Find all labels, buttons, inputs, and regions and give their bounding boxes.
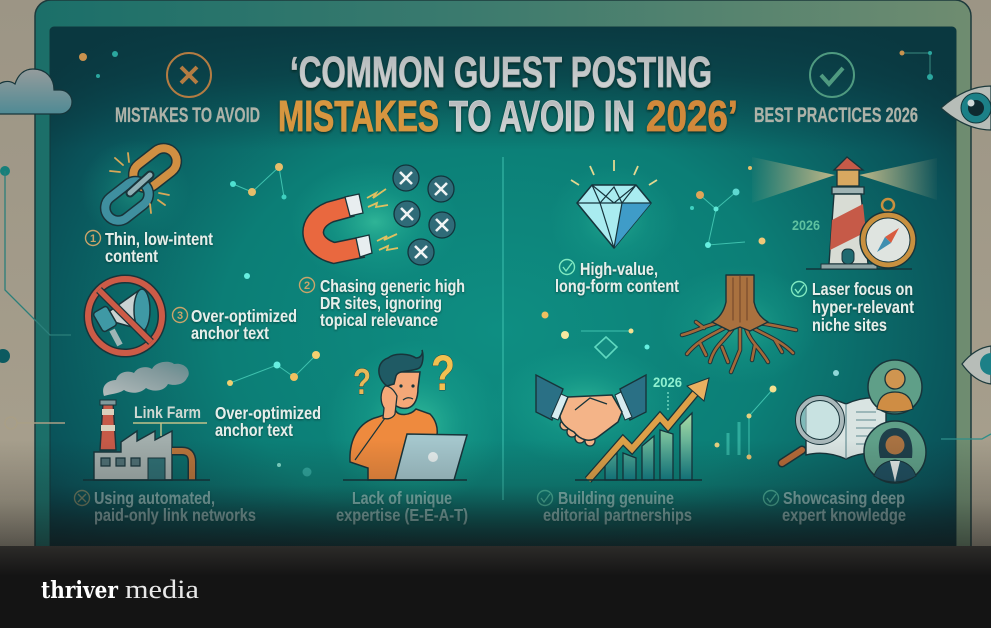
text: over-optimized anchor text: Over-optimized [215,403,321,423]
text: thin low-intent content: content [105,246,158,266]
text: high-value long-form content: High-value, [580,259,658,279]
icon: handshake [536,375,646,446]
icon: magnet attracting crosses [313,165,455,265]
text: chasing generic high DR sites: Chasing generic high [320,276,465,296]
text: using automated paid-only link networks [74,488,256,525]
text: building genuine editorial partnerships [538,488,692,525]
icon: eye upper right [941,86,991,130]
text: showcasing deep expert knowledge [764,488,906,525]
icon: tree roots [682,275,796,372]
text: building genuine editorial partnerships: editorial partnerships [543,505,692,525]
text: over-optimized anchor text 3: Over-optimized [191,306,297,326]
footer band [0,546,991,576]
small diamond ornament [595,337,617,358]
text: chasing generic high DR sites: 2 [304,280,310,292]
circuit line with node [0,166,71,363]
text: laser focus niche sites [792,279,914,335]
text: laser focus niche sites: niche sites [812,315,887,335]
text: thin low-intent content: 1 [90,233,96,245]
icon: lighthouse with compass: 2026 [792,217,820,233]
center divider [502,157,504,500]
text: lack of unique expertise: expertise (E-E-A-T) [336,505,468,525]
icon: confused person at laptop [343,345,467,480]
text: lack of unique expertise [336,488,468,525]
text: chasing generic high DR sites [300,276,465,330]
icon: cross circle [167,53,211,97]
cloud decoration [0,69,72,114]
text: laser focus niche sites: hyper-relevant [812,297,914,317]
text: thin low-intent content [86,229,213,266]
text: thin low-intent content: Thin, low-intent [105,229,213,249]
text: showcasing deep expert knowledge: Showcasing deep [783,488,905,508]
header: mistakes to avoid [115,53,260,127]
constellations and dots [79,50,933,476]
title: ‘COMMON GUEST POSTING [290,48,712,97]
header: best practices [754,53,918,127]
icon: growth chart with arrow: 2026 [653,374,682,390]
text: over-optimized anchor text [215,403,321,440]
header: mistakes to avoid: MISTAKES TO AVOID [115,104,260,127]
title: MISTAKES [278,92,439,141]
footer bar [0,575,991,628]
text: laser focus niche sites: Laser focus on [812,279,913,299]
icon: link farm factory: Link Farm [134,403,201,422]
icon: crossed-out megaphone [88,279,162,353]
soft glows behind icons [80,140,820,510]
bottom fade overlay [0,440,991,546]
text: chasing generic high DR sites: topical relevance [320,310,438,330]
text: over-optimized anchor text 3: anchor text [191,323,269,343]
text: over-optimized anchor text 3 [172,306,297,343]
icon: link farm factory [83,362,210,480]
beige circuit node [5,417,65,429]
icon: check circle [810,53,854,97]
icon: eye lower right [962,346,991,384]
text: high-value long-form content: long-form content [555,276,679,296]
icon: confused person at laptop: ? [431,345,455,401]
text: over-optimized anchor text 3: 3 [177,310,183,322]
icon: broken chain link [100,143,182,226]
title: TO AVOID IN [449,92,635,141]
text: building genuine editorial partnerships: Building genuine [558,488,674,508]
icon: lighthouse with compass [752,157,937,269]
title: 2026’ [646,92,738,141]
text: lack of unique expertise: Lack of unique [352,488,452,508]
icon: book with magnifier and experts [782,360,926,483]
text: over-optimized anchor text: anchor text [215,420,293,440]
header: best practices: BEST PRACTICES 2026 [754,104,918,127]
logo: thriver media [41,575,200,604]
text: chasing generic high DR sites: DR sites, ignoring [320,293,442,313]
text: showcasing deep expert knowledge: expert knowledge [782,505,906,525]
text: using automated paid-only link networks: paid-only link networks [94,505,256,525]
right circuit line [941,434,991,439]
title [278,48,738,141]
text: high-value long-form content [555,259,679,296]
icon: growth chart with arrow [575,374,709,480]
icon: diamond [571,160,657,248]
screen panel [50,27,956,567]
icon: confused person at laptop: ? [353,361,371,402]
text: using automated paid-only link networks: Using automated, [94,488,215,508]
logo: thriver media: media [125,575,200,604]
logo: thriver media: thriver [41,577,119,604]
